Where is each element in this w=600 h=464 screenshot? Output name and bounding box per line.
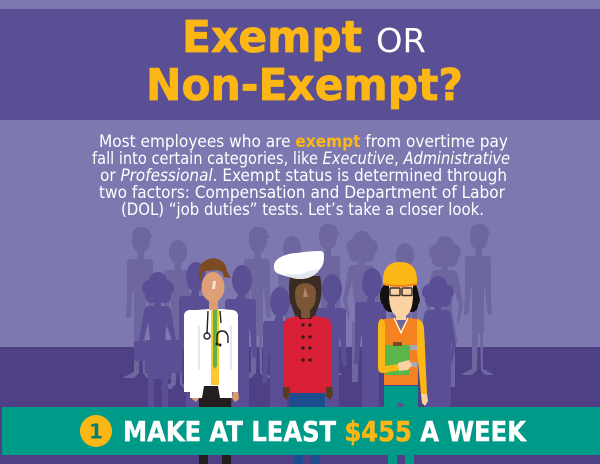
character: construction worker bbox=[378, 262, 428, 464]
front row silhouettes bbox=[134, 262, 456, 433]
intro text block: Most employees who are exempt from overtime pay bbox=[99, 132, 508, 151]
vest bbox=[384, 318, 418, 385]
number badge: 1 bbox=[89, 420, 103, 444]
hands bbox=[192, 391, 239, 402]
intro text block: two factors: Compensation and Department of Labor bbox=[99, 183, 505, 202]
intro text block: (DOL) “job duties” tests. Let’s take a closer look. bbox=[121, 200, 484, 219]
hands bbox=[283, 386, 333, 400]
banner text: MAKE AT LEAST $455 A WEEK bbox=[123, 416, 527, 448]
character: chef bbox=[274, 251, 333, 464]
left arm bbox=[378, 319, 400, 373]
back row silhouettes bbox=[124, 224, 493, 392]
hair bbox=[380, 283, 420, 312]
neck and face bbox=[301, 306, 310, 318]
glasses bbox=[390, 288, 412, 296]
trousers bbox=[199, 385, 231, 464]
shirt and tie bbox=[211, 310, 219, 385]
helmet bbox=[383, 262, 417, 286]
trousers bbox=[290, 393, 325, 464]
chef hat bbox=[274, 251, 324, 279]
intro text block bbox=[92, 132, 510, 219]
title: OR: OR bbox=[376, 21, 426, 60]
right arm bbox=[417, 319, 427, 394]
trousers bbox=[384, 385, 418, 464]
intro text block: fall into certain categories, like Executive, Administrative bbox=[92, 149, 510, 168]
buttons bbox=[301, 323, 312, 362]
character: doctor bbox=[184, 258, 239, 464]
background wall bbox=[0, 0, 600, 347]
banner bbox=[2, 407, 600, 455]
neck and face bbox=[396, 306, 406, 320]
stethoscope bbox=[204, 311, 228, 343]
intro text block: or Professional. Exempt status is determined through bbox=[100, 166, 507, 185]
coat bbox=[184, 309, 238, 398]
number badge bbox=[80, 415, 112, 447]
jacket bbox=[283, 316, 332, 393]
title: Exempt: Exempt bbox=[182, 12, 362, 63]
hair bbox=[289, 276, 322, 318]
title: Non-Exempt?: Non-Exempt? bbox=[146, 60, 463, 111]
title band bbox=[0, 9, 600, 120]
neck and head bbox=[209, 298, 218, 310]
clipboard bbox=[385, 345, 410, 375]
floor bbox=[0, 347, 600, 464]
hair bbox=[199, 258, 231, 280]
